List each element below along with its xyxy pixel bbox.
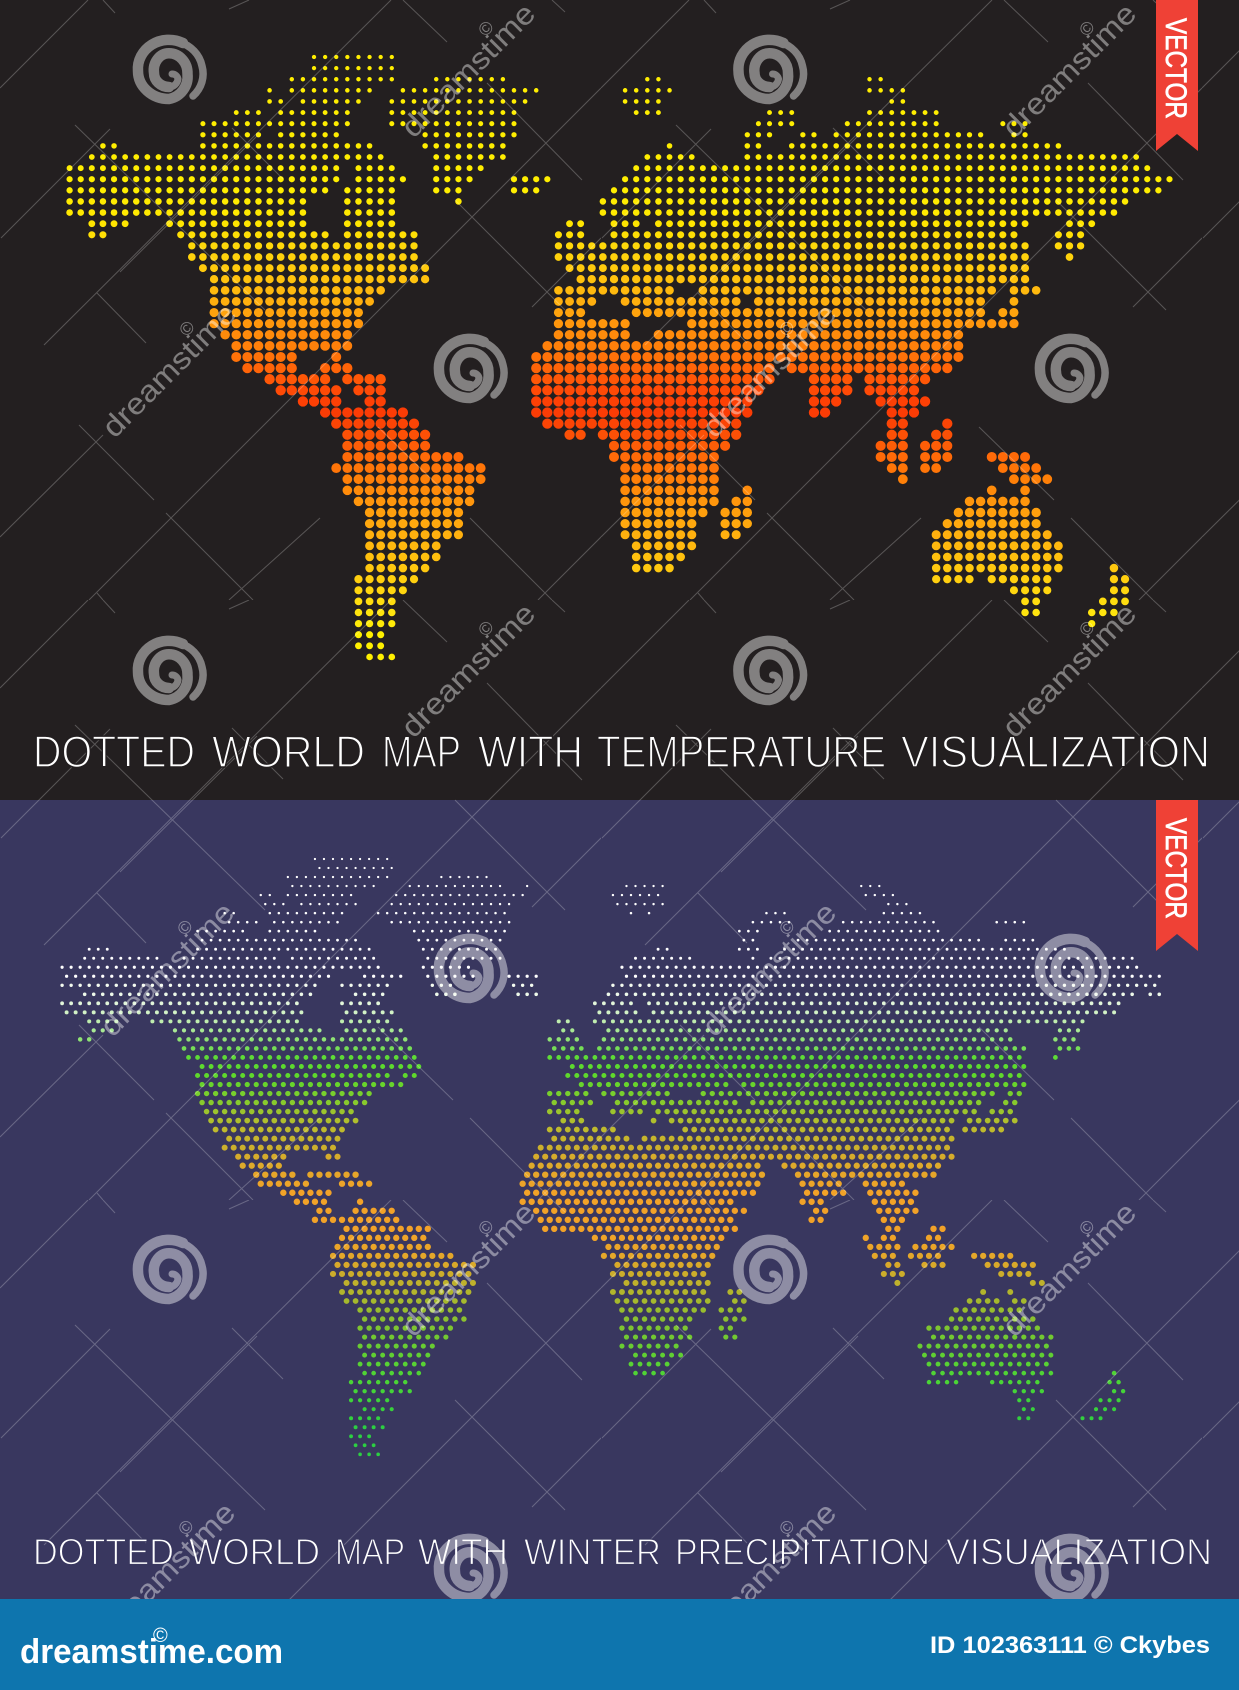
watermark wordmarks: dreamstime <box>395 597 542 744</box>
watermark wordmarks: © <box>175 317 199 340</box>
title: winter precipitation visualization: PRECIPITATION <box>675 1532 930 1572</box>
watermark wordmarks: dreamstime <box>996 1196 1143 1343</box>
title: temperature visualization: MAP <box>382 728 461 777</box>
watermark wordmarks: dreamstime <box>95 1496 242 1643</box>
watermark wordmarks: © <box>775 1516 799 1539</box>
title: winter precipitation visualization: VISUALIZATION <box>946 1532 1212 1572</box>
title: winter precipitation visualization <box>33 1532 1212 1572</box>
watermark wordmarks: © <box>1075 617 1099 640</box>
watermark wordmarks: © <box>474 617 498 640</box>
watermark wordmarks: dreamstime <box>996 597 1143 744</box>
title: winter precipitation visualization: DOTTED <box>33 1532 174 1572</box>
watermark wordmarks: © <box>775 916 799 939</box>
title: temperature visualization <box>33 728 1210 777</box>
watermark wordmarks: dreamstime <box>696 896 843 1043</box>
title: winter precipitation visualization: WINTER <box>524 1532 661 1572</box>
watermark wordmarks: © <box>1075 1216 1099 1239</box>
watermark wordmarks: dreamstime <box>996 0 1143 144</box>
watermark wordmarks: © <box>474 1216 498 1239</box>
footer bar: ID 102363111 © Ckybes <box>930 1632 1210 1659</box>
watermark wordmarks: © <box>1075 17 1099 40</box>
watermark wordmarks: dreamstime <box>96 297 243 444</box>
watermark wordmarks: © <box>474 17 498 40</box>
title: winter precipitation visualization: WORLD <box>189 1532 320 1572</box>
ribbon: vector badge bottom: VECTOR <box>1159 818 1192 919</box>
title: temperature visualization: TEMPERATURE <box>597 728 886 777</box>
title: temperature visualization: WORLD <box>212 728 365 777</box>
panel: temperature background <box>0 0 1239 800</box>
title: temperature visualization: VISUALIZATION <box>901 728 1210 777</box>
watermark wordmarks: dreamstime <box>395 1196 542 1343</box>
watermark wordmarks: © <box>775 317 799 340</box>
title: temperature visualization: DOTTED <box>33 728 195 777</box>
title: winter precipitation visualization: WITH <box>418 1532 508 1572</box>
footer bar: dreamstime.com <box>20 1633 283 1671</box>
title: temperature visualization: WITH <box>478 728 583 777</box>
ribbon: vector badge bottom <box>1156 800 1198 951</box>
footer bar <box>0 1599 1239 1690</box>
ribbon: vector badge top: VECTOR <box>1159 18 1192 119</box>
dotted world map: temperature <box>70 57 1171 657</box>
dotted world map: winter precipitation <box>62 859 1160 1454</box>
panel: precipitation background <box>0 800 1239 1600</box>
watermark spirals <box>138 40 1105 1598</box>
ribbon: vector badge top <box>1156 0 1198 151</box>
footer bar: © <box>153 1625 168 1647</box>
watermark wordmarks: © <box>173 916 197 939</box>
watermark wordmarks: dreamstime <box>696 1496 843 1643</box>
title: winter precipitation visualization: MAP <box>335 1532 405 1572</box>
watermark wordmarks: © <box>174 1516 198 1539</box>
watermark wordmarks: dreamstime <box>696 297 843 444</box>
watermark wordmarks: dreamstime <box>395 0 542 144</box>
watermark wordmarks: dreamstime <box>94 896 241 1043</box>
